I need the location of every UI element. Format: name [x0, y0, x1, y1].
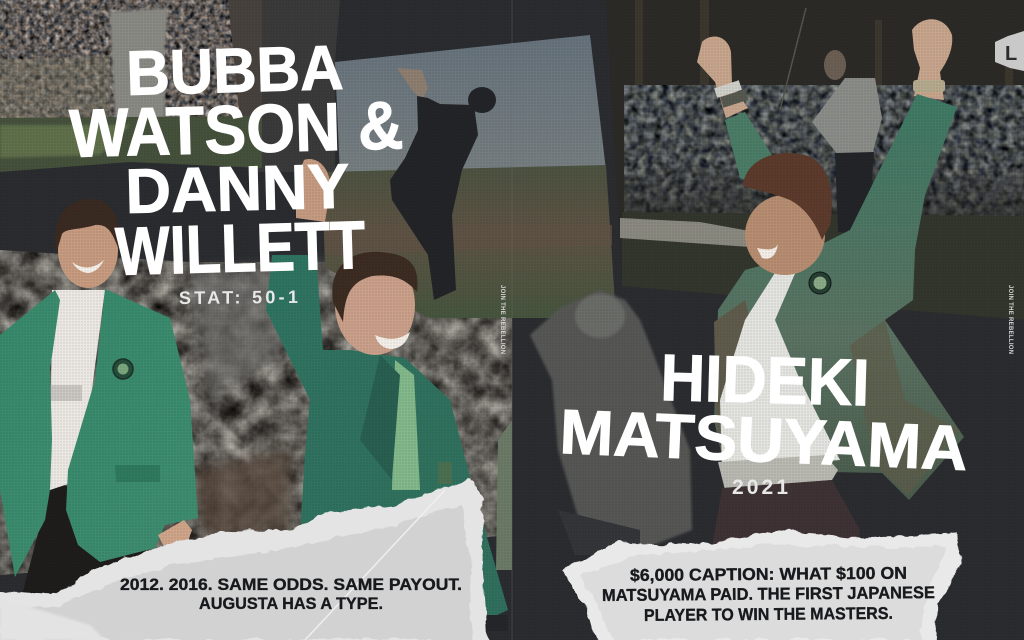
- title: Bubba Watson and Danny Willett: DANNY: [125, 152, 350, 227]
- vertical tagline: left page: JOIN THE REBELLION: [499, 285, 505, 354]
- title: Bubba Watson and Danny Willett: [68, 33, 404, 290]
- ghost golfer silhouette: [530, 290, 692, 555]
- stat: 50-1 odds: STAT: 50-1: [179, 287, 298, 308]
- title: Bubba Watson and Danny Willett: WILLETT: [114, 207, 366, 290]
- caption text: left: 2012. 2016. SAME ODDS. SAME PAYOUT.: [120, 575, 462, 594]
- page centre fold: [511, 0, 513, 640]
- title: Hideki Matsuyama: MATSUYAMA: [558, 397, 969, 484]
- caption text: left: [120, 575, 462, 613]
- caption text: right: MATSUYAMA PAID. THE FIRST JAPANESE: [602, 583, 935, 605]
- figure: Danny Willett: [266, 159, 508, 631]
- photo: swinging golfer: [322, 35, 616, 318]
- caption text: left: AUGUSTA HAS A TYPE.: [199, 594, 383, 613]
- title: Hideki Matsuyama: [558, 340, 969, 484]
- figure: Bubba Watson: [0, 199, 198, 595]
- figure: Hideki Matsuyama: [697, 19, 964, 548]
- torn paper: right caption: [560, 530, 962, 640]
- caption text: right: PLAYER TO WIN THE MASTERS.: [644, 604, 893, 625]
- caption text: right: $6,000 CAPTION: WHAT $100 ON: [630, 564, 907, 585]
- year: 2021: 2021: [732, 476, 788, 499]
- torn paper: left caption: [0, 478, 488, 640]
- logo: L badge: L: [1005, 43, 1017, 65]
- title: Hideki Matsuyama: HIDEKI: [660, 340, 870, 419]
- logo: L badge: [995, 31, 1024, 71]
- vertical tagline: right page: JOIN THE REBELLION: [1007, 285, 1013, 354]
- photo: left crowd and green: [0, 0, 340, 172]
- photo: right crowd and fairway: [606, 0, 1024, 320]
- photo: grey foliage backdrop: [0, 250, 512, 580]
- caption text: right: [602, 564, 935, 625]
- title: Bubba Watson and Danny Willett: WATSON &: [68, 87, 404, 172]
- title: Bubba Watson and Danny Willett: BUBBA: [125, 33, 344, 109]
- figure: partial person at page edge: [496, 420, 512, 570]
